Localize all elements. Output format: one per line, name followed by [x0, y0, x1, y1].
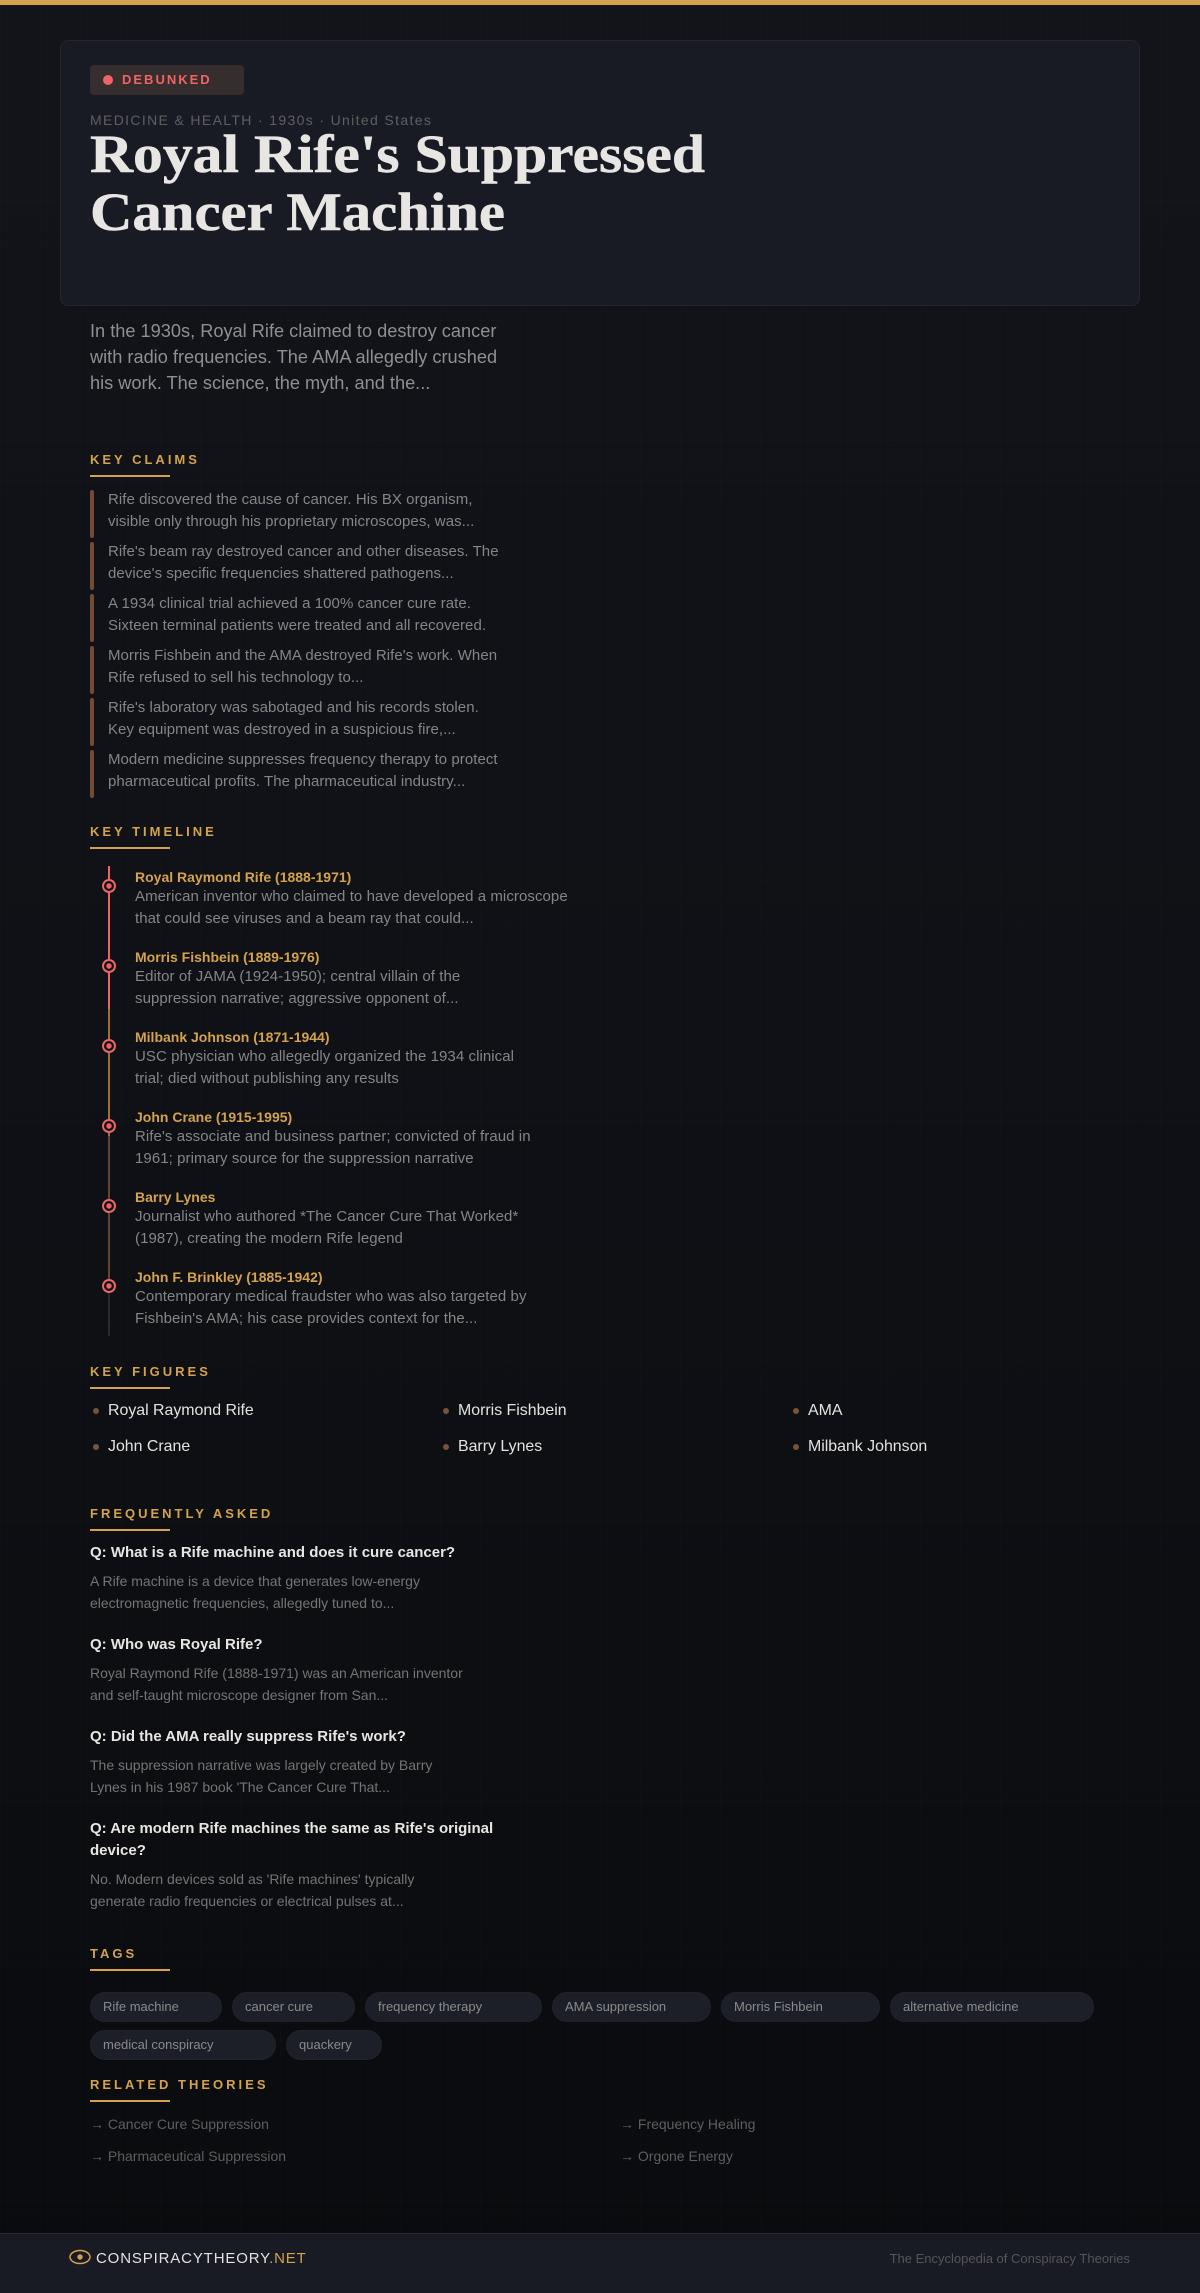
claim 6 — [90, 750, 498, 798]
title: Royal Rife's Suppressed — [90, 124, 705, 184]
figure: Royal Raymond Rife: Royal Raymond Rife — [108, 1402, 254, 1419]
figure: Milbank Johnson: Milbank Johnson — [808, 1438, 927, 1455]
panel: FAQ list — [90, 1544, 493, 1909]
timeline entry: John Crane: 1961; primary source for the suppression narrative — [135, 1150, 474, 1167]
tag: alternative medicine — [903, 1999, 1019, 2014]
intro text: In the 1930s, Royal Rife claimed to destroy cancer — [90, 321, 496, 341]
claim 4 — [90, 646, 497, 694]
heading: tags: TAGS — [90, 1946, 137, 1961]
claim 6: pharmaceutical profits. The pharmaceutical industry... — [108, 773, 465, 790]
FAQ item 1: Q: What is a Rife machine and does it cure cancer? — [90, 1544, 455, 1561]
claim 2 — [90, 542, 499, 590]
title: Cancer Machine — [90, 182, 505, 242]
timeline entry: Milbank Johnson: USC physician who allegedly organized the 1934 clinical — [135, 1048, 514, 1065]
timeline line — [108, 866, 110, 1336]
timeline entry: Barry Lynes: Barry Lynes — [135, 1189, 215, 1205]
timeline entry: John Crane: Rife's associate and business partner; convicted of fraud in — [135, 1128, 531, 1145]
FAQ item 1: A Rife machine is a device that generates low-energy — [90, 1573, 420, 1589]
tag — [721, 1992, 880, 2022]
icon: eye logo — [69, 2250, 91, 2264]
timeline entry: Barry Lynes: Journalist who authored *The Cancer Cure That Worked* — [135, 1208, 518, 1225]
claim 5 — [90, 698, 479, 746]
tag: AMA suppression — [565, 1999, 666, 2014]
FAQ item 1 — [90, 1544, 455, 1611]
related link: → Orgone Energy — [620, 2148, 733, 2164]
timeline entry: Morris Fishbein — [102, 949, 460, 1007]
timeline entry: John Crane: John Crane (1915-1995) — [135, 1109, 292, 1125]
claim 2: Rife's beam ray destroyed cancer and other diseases. The — [108, 543, 499, 560]
claim 5: Rife's laboratory was sabotaged and his records stolen. — [108, 699, 479, 716]
panel: key claims list — [90, 490, 499, 798]
tag — [286, 2030, 382, 2060]
related link: → Pharmaceutical Suppression — [90, 2148, 286, 2164]
tag: Morris Fishbein — [734, 1999, 823, 2014]
figure: AMA — [793, 1402, 842, 1419]
FAQ item 2: and self-taught microscope designer from San... — [90, 1687, 388, 1703]
tag — [90, 2030, 276, 2060]
heading: related theories: RELATED THEORIES — [90, 2077, 268, 2092]
tag: Rife machine — [103, 1999, 179, 2014]
claim 2: device's specific frequencies shattered pathogens... — [108, 565, 454, 582]
figure: Morris Fishbein: Morris Fishbein — [458, 1402, 567, 1419]
tag: medical conspiracy — [103, 2037, 214, 2052]
timeline entry: John F. Brinkley: Contemporary medical fraudster who was also targeted by — [135, 1288, 527, 1305]
claim 3 — [90, 594, 486, 642]
tag — [365, 1992, 542, 2022]
FAQ item 2: Q: Who was Royal Rife? — [90, 1636, 263, 1653]
panel: key figures grid — [93, 1402, 927, 1455]
FAQ item 3: Lynes in his 1987 book 'The Cancer Cure That... — [90, 1779, 390, 1795]
panel: header card — [60, 40, 1140, 306]
timeline entry: Morris Fishbein: Editor of JAMA (1924-1950); central villain of the — [135, 968, 460, 985]
intro text: with radio frequencies. The AMA allegedly crushed — [90, 347, 497, 367]
figure: John Crane: John Crane — [108, 1438, 190, 1455]
timeline entry: Royal Raymond Rife: American inventor who claimed to have developed a microscope — [135, 888, 568, 905]
tag — [552, 1992, 711, 2022]
icon: status dot — [103, 75, 113, 85]
FAQ item 4 — [90, 1820, 493, 1909]
claim 3: Sixteen terminal patients were treated and all recovered. — [108, 617, 486, 634]
timeline entry: Barry Lynes: (1987), creating the modern Rife legend — [135, 1230, 403, 1247]
related link: → Cancer Cure Suppression — [90, 2116, 269, 2132]
FAQ item 2: Royal Raymond Rife (1888-1971) was an American inventor — [90, 1665, 463, 1681]
badge label: DEBUNKED — [122, 72, 212, 87]
status badge: debunked — [90, 65, 244, 95]
claim 1 — [90, 490, 474, 538]
category meta line: MEDICINE & HEALTH · 1930s · United States — [90, 112, 432, 128]
timeline — [102, 866, 568, 1336]
tag: cancer cure — [245, 1999, 313, 2014]
claim 4: Morris Fishbein and the AMA destroyed Rife's work. When — [108, 647, 497, 664]
claim 4: Rife refused to sell his technology to... — [108, 669, 364, 686]
FAQ item 4: No. Modern devices sold as 'Rife machines' typically — [90, 1871, 414, 1887]
FAQ item 4: device? — [90, 1842, 146, 1859]
timeline entry: Royal Raymond Rife: that could see viruses and a beam ray that could... — [135, 910, 474, 927]
claim 6: Modern medicine suppresses frequency therapy to protect — [108, 751, 498, 768]
FAQ item 3: Q: Did the AMA really suppress Rife's work? — [90, 1728, 406, 1745]
FAQ item 1: electromagnetic frequencies, allegedly tuned to... — [90, 1595, 394, 1611]
intro text — [90, 321, 497, 393]
FAQ item 2 — [90, 1636, 463, 1703]
footer logo wordmark: CONSPIRACYTHEORY.NET — [96, 2250, 307, 2267]
tag — [232, 1992, 355, 2022]
figure: Barry Lynes: Barry Lynes — [458, 1438, 542, 1455]
tag: quackery — [299, 2037, 352, 2052]
heading: frequently asked: FREQUENTLY ASKED — [90, 1506, 273, 1521]
claim 3: A 1934 clinical trial achieved a 100% cancer cure rate. — [108, 595, 471, 612]
claim 1: Rife discovered the cause of cancer. His BX organism, — [108, 491, 472, 508]
heading: key claims: KEY CLAIMS — [90, 452, 200, 467]
related link: → Frequency Healing — [620, 2116, 755, 2132]
timeline entry: Milbank Johnson: Milbank Johnson (1871-1944) — [135, 1029, 330, 1045]
claim 1: visible only through his proprietary microscopes, was... — [108, 513, 474, 530]
intro text: his work. The science, the myth, and the... — [90, 373, 430, 393]
timeline entry: Milbank Johnson — [102, 1029, 514, 1087]
timeline entry: Royal Raymond Rife: Royal Raymond Rife (1888-1971) — [135, 869, 351, 885]
top accent bar — [0, 0, 1200, 5]
title — [90, 124, 705, 242]
timeline entry: Royal Raymond Rife — [102, 869, 568, 927]
timeline entry: John F. Brinkley — [102, 1269, 527, 1327]
heading: key timeline: KEY TIMELINE — [90, 824, 217, 839]
FAQ item 3: The suppression narrative was largely created by Barry — [90, 1757, 432, 1773]
footer — [0, 2233, 1200, 2293]
timeline entry: John F. Brinkley: John F. Brinkley (1885-1942) — [135, 1269, 323, 1285]
FAQ item 4: Q: Are modern Rife machines the same as Rife's original — [90, 1820, 493, 1837]
footer tagline: The Encyclopedia of Conspiracy Theories — [890, 2251, 1130, 2266]
tag — [890, 1992, 1094, 2022]
timeline entry: Barry Lynes — [102, 1189, 518, 1247]
panel: related theories — [90, 2116, 755, 2164]
tag — [90, 1992, 222, 2022]
FAQ item 3 — [90, 1728, 432, 1795]
timeline entry: Morris Fishbein: suppression narrative; aggressive opponent of... — [135, 990, 459, 1007]
timeline entry: John Crane — [102, 1109, 531, 1167]
claim 5: Key equipment was destroyed in a suspicious fire,... — [108, 721, 456, 738]
FAQ item 4: generate radio frequencies or electrical pulses at... — [90, 1893, 404, 1909]
timeline entry: Morris Fishbein: Morris Fishbein (1889-1976) — [135, 949, 319, 965]
panel: tags — [90, 1992, 1094, 2060]
tag: frequency therapy — [378, 1999, 482, 2014]
heading: key figures: KEY FIGURES — [90, 1364, 211, 1379]
figure: AMA: AMA — [808, 1402, 842, 1419]
timeline entry: Milbank Johnson: trial; died without publishing any results — [135, 1070, 399, 1087]
timeline entry: John F. Brinkley: Fishbein's AMA; his case provides context for the... — [135, 1310, 478, 1327]
